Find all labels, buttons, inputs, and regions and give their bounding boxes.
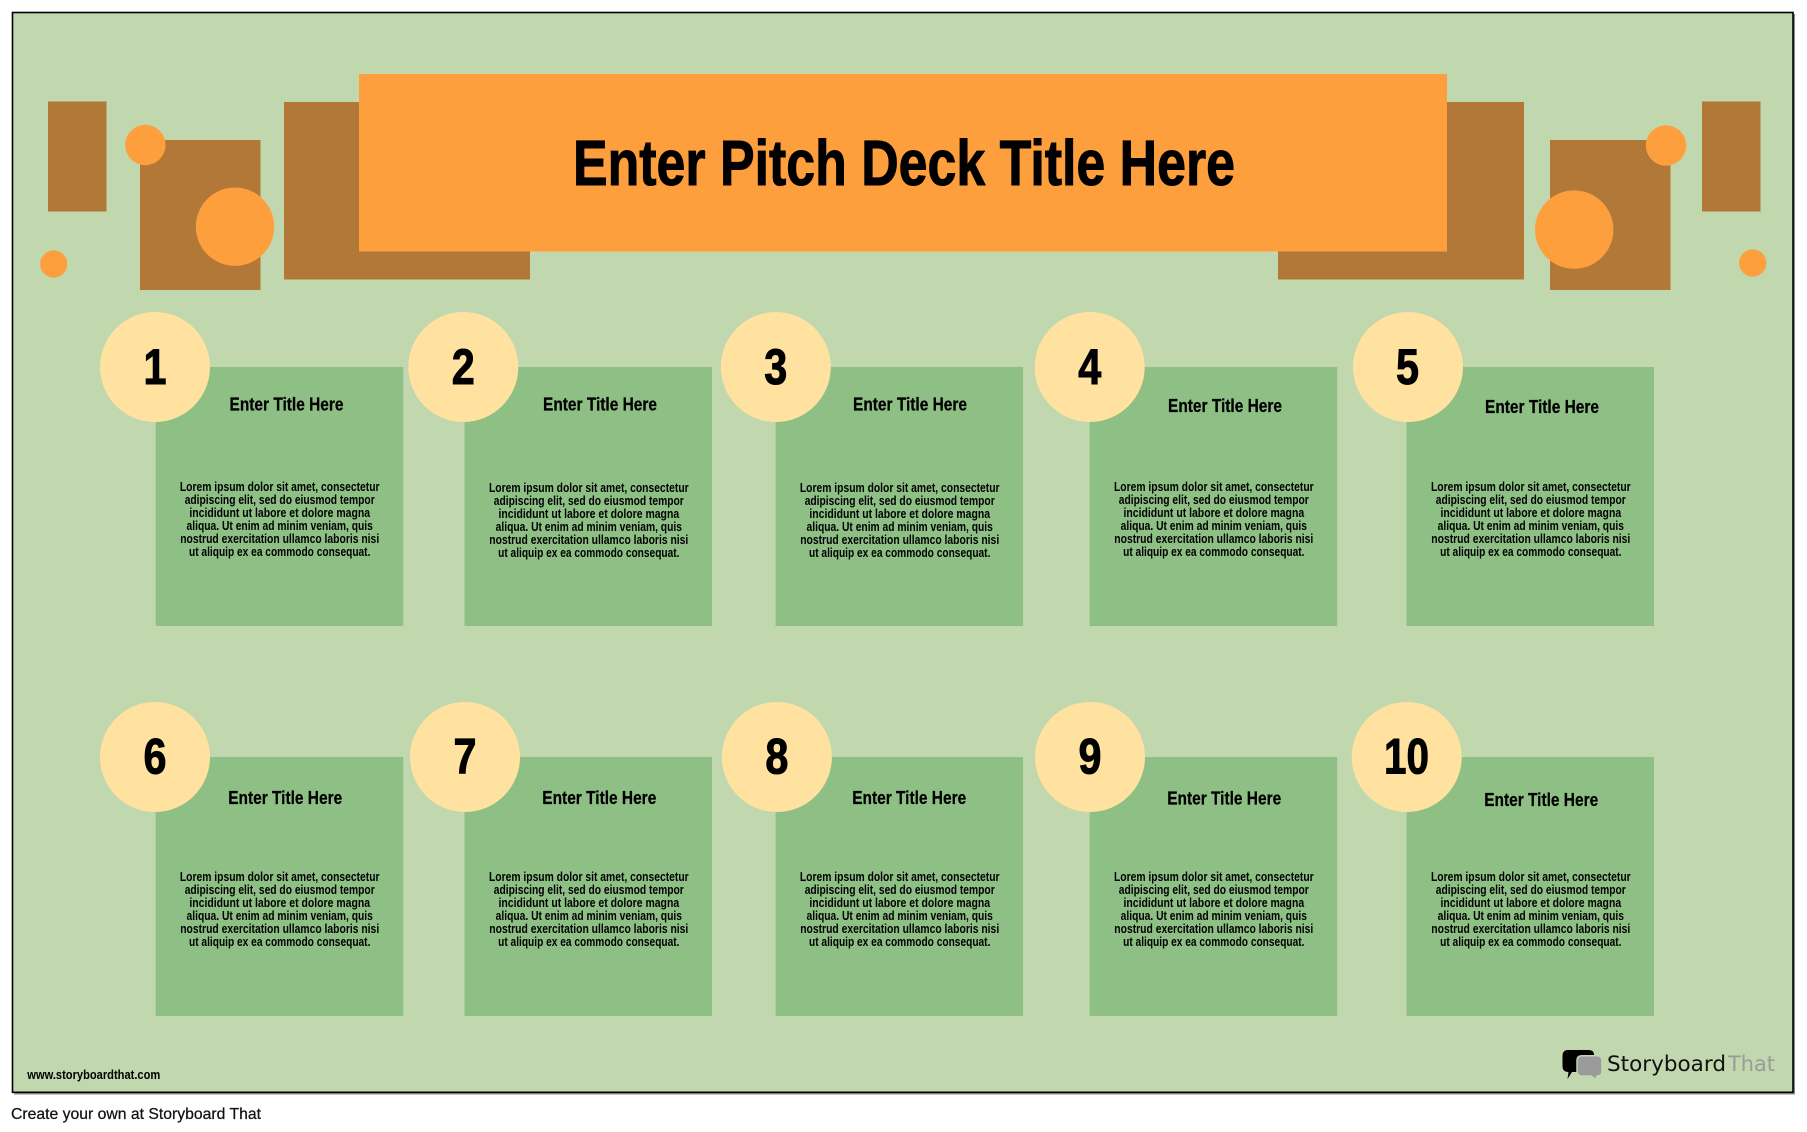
card 1: ut aliquip ex ea commodo consequat. bbox=[189, 545, 370, 559]
card 8: aliqua. Ut enim ad minim veniam, quis bbox=[807, 909, 993, 923]
card 4: ut aliquip ex ea commodo consequat. bbox=[1123, 545, 1305, 559]
card 8 bbox=[722, 702, 1023, 1016]
card 3: aliqua. Ut enim ad minim veniam, quis bbox=[807, 520, 993, 534]
card 2: 2 bbox=[452, 339, 475, 395]
card 7: nostrud exercitation ullamco laboris nisi bbox=[489, 922, 688, 936]
card 2: Lorem ipsum dolor sit amet, consectetur bbox=[489, 481, 689, 495]
card 4: incididunt ut labore et dolore magna bbox=[1123, 506, 1305, 520]
card 5: 5 bbox=[1396, 339, 1419, 395]
card 2: incididunt ut labore et dolore magna bbox=[498, 507, 680, 521]
card 1: adipiscing elit, sed do eiusmod tempor bbox=[185, 493, 375, 507]
card 5: incididunt ut labore et dolore magna bbox=[1440, 506, 1622, 520]
card 10: 10 bbox=[1384, 729, 1429, 785]
card 7: incididunt ut labore et dolore magna bbox=[498, 896, 680, 910]
card 4: adipiscing elit, sed do eiusmod tempor bbox=[1119, 493, 1309, 507]
card 3: adipiscing elit, sed do eiusmod tempor bbox=[805, 494, 995, 508]
card 4: Lorem ipsum dolor sit amet, consectetur bbox=[1114, 480, 1314, 494]
card 5: nostrud exercitation ullamco laboris nisi bbox=[1431, 532, 1630, 546]
card 8: 8 bbox=[765, 729, 788, 785]
storyboard that wordmark: Storyboard bbox=[1607, 1052, 1726, 1076]
card 5: aliqua. Ut enim ad minim veniam, quis bbox=[1438, 519, 1624, 533]
card 10: adipiscing elit, sed do eiusmod tempor bbox=[1436, 883, 1626, 897]
card 8: Enter Title Here bbox=[852, 788, 966, 808]
card 10: ut aliquip ex ea commodo consequat. bbox=[1440, 935, 1622, 949]
card 9: Lorem ipsum dolor sit amet, consectetur bbox=[1114, 870, 1314, 884]
card 7: 7 bbox=[454, 729, 476, 785]
card 4 bbox=[1035, 312, 1337, 626]
card 9: 9 bbox=[1078, 729, 1102, 785]
card 1: aliqua. Ut enim ad minim veniam, quis bbox=[187, 519, 373, 533]
card 1: nostrud exercitation ullamco laboris nisi bbox=[180, 532, 379, 546]
card 4: aliqua. Ut enim ad minim veniam, quis bbox=[1121, 519, 1307, 533]
card 9: ut aliquip ex ea commodo consequat. bbox=[1123, 935, 1305, 949]
card 5: Lorem ipsum dolor sit amet, consectetur bbox=[1431, 480, 1631, 494]
card 10: Enter Title Here bbox=[1484, 790, 1598, 810]
card 7: aliqua. Ut enim ad minim veniam, quis bbox=[496, 909, 682, 923]
website url: www.storyboardthat.com bbox=[26, 1067, 160, 1082]
card 1: Enter Title Here bbox=[230, 395, 344, 415]
card 5: adipiscing elit, sed do eiusmod tempor bbox=[1436, 493, 1626, 507]
card 6: Lorem ipsum dolor sit amet, consectetur bbox=[180, 870, 380, 884]
card 6: aliqua. Ut enim ad minim veniam, quis bbox=[187, 909, 373, 923]
card 1: Lorem ipsum dolor sit amet, consectetur bbox=[180, 480, 380, 494]
storyboard that wordmark: That bbox=[1727, 1052, 1775, 1076]
card 9: aliqua. Ut enim ad minim veniam, quis bbox=[1121, 909, 1307, 923]
card 10: Lorem ipsum dolor sit amet, consectetur bbox=[1431, 870, 1631, 884]
card 6: incididunt ut labore et dolore magna bbox=[189, 896, 371, 910]
card 3: nostrud exercitation ullamco laboris nisi bbox=[800, 533, 999, 547]
card 8: nostrud exercitation ullamco laboris nisi bbox=[800, 922, 999, 936]
card 5: Enter Title Here bbox=[1485, 397, 1599, 417]
card 2: aliqua. Ut enim ad minim veniam, quis bbox=[496, 520, 682, 534]
card 6: ut aliquip ex ea commodo consequat. bbox=[189, 935, 370, 949]
card 7: adipiscing elit, sed do eiusmod tempor bbox=[494, 883, 684, 897]
card 4: nostrud exercitation ullamco laboris nisi bbox=[1114, 532, 1313, 546]
card 8: ut aliquip ex ea commodo consequat. bbox=[809, 935, 990, 949]
card 7: ut aliquip ex ea commodo consequat. bbox=[498, 935, 679, 949]
title banner: Enter Pitch Deck Title Here bbox=[573, 127, 1235, 199]
card 5: ut aliquip ex ea commodo consequat. bbox=[1440, 545, 1622, 559]
icon: speech bubbles logo bbox=[1562, 1050, 1602, 1080]
card 4: 4 bbox=[1078, 339, 1101, 395]
card 6: nostrud exercitation ullamco laboris nisi bbox=[180, 922, 379, 936]
card 3: incididunt ut labore et dolore magna bbox=[809, 507, 991, 521]
card 6: Enter Title Here bbox=[228, 788, 342, 808]
card 2: Enter Title Here bbox=[543, 395, 657, 415]
card 2: adipiscing elit, sed do eiusmod tempor bbox=[494, 494, 684, 508]
title banner bbox=[359, 74, 1447, 252]
card 2: nostrud exercitation ullamco laboris nisi bbox=[489, 533, 688, 547]
card 9: incididunt ut labore et dolore magna bbox=[1123, 896, 1305, 910]
card 3: 3 bbox=[764, 339, 787, 395]
card 9 bbox=[1035, 702, 1337, 1016]
card 8: Lorem ipsum dolor sit amet, consectetur bbox=[800, 870, 1000, 884]
card 1 bbox=[100, 312, 403, 626]
card 9: nostrud exercitation ullamco laboris nisi bbox=[1114, 922, 1313, 936]
card 10: incididunt ut labore et dolore magna bbox=[1440, 896, 1622, 910]
card 6: 6 bbox=[144, 729, 166, 785]
card 2 bbox=[408, 312, 712, 626]
card 10: nostrud exercitation ullamco laboris nisi bbox=[1431, 922, 1630, 936]
card 8: incididunt ut labore et dolore magna bbox=[809, 896, 991, 910]
card 1: incididunt ut labore et dolore magna bbox=[189, 506, 371, 520]
card 10 bbox=[1352, 702, 1654, 1016]
card 6: adipiscing elit, sed do eiusmod tempor bbox=[185, 883, 375, 897]
card 9: adipiscing elit, sed do eiusmod tempor bbox=[1119, 883, 1309, 897]
card 8: adipiscing elit, sed do eiusmod tempor bbox=[805, 883, 995, 897]
decoration: left header shapes bbox=[40, 102, 530, 290]
card 3 bbox=[721, 312, 1023, 626]
card 6 bbox=[100, 702, 403, 1016]
card 9: Enter Title Here bbox=[1167, 789, 1281, 809]
caption below poster: Create your own at Storyboard That bbox=[11, 1106, 262, 1123]
card 7: Enter Title Here bbox=[542, 788, 656, 808]
card 3: Enter Title Here bbox=[853, 395, 967, 415]
card 1: 1 bbox=[144, 339, 166, 395]
card 2: ut aliquip ex ea commodo consequat. bbox=[498, 546, 679, 560]
card 3: ut aliquip ex ea commodo consequat. bbox=[809, 546, 990, 560]
card 3: Lorem ipsum dolor sit amet, consectetur bbox=[800, 481, 1000, 495]
card 10: aliqua. Ut enim ad minim veniam, quis bbox=[1438, 909, 1624, 923]
decoration: right header shapes bbox=[1278, 102, 1766, 290]
card 7 bbox=[410, 702, 712, 1016]
card 5 bbox=[1353, 312, 1654, 626]
card 7: Lorem ipsum dolor sit amet, consectetur bbox=[489, 870, 689, 884]
card 4: Enter Title Here bbox=[1168, 396, 1282, 416]
